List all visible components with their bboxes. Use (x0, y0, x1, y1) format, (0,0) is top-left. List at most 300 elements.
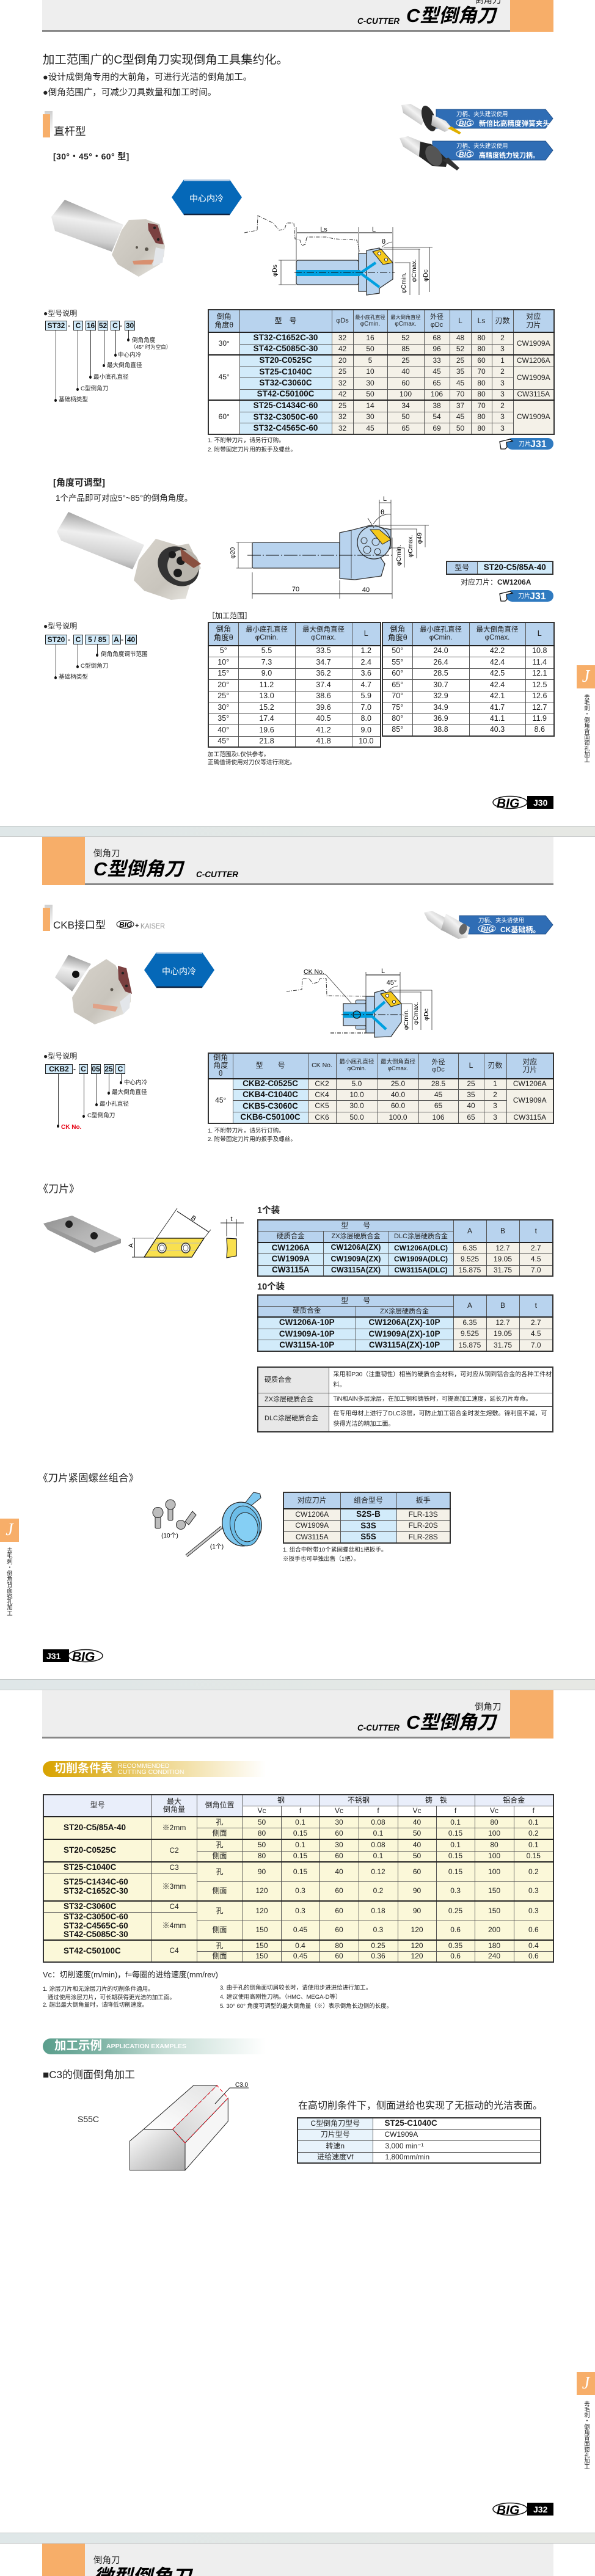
machining range table: 50-85 degrees: 12.7 (532, 703, 547, 712)
code boxes: C (76, 321, 81, 330)
cutting conditions table: 0.15 (293, 1829, 307, 1837)
cutting conditions table: ST32-C4565C-60 (64, 1921, 128, 1930)
section tab marker: straight shank (43, 111, 53, 137)
spec table: straight shank models: ST20-C0525C (259, 356, 312, 365)
spec table: straight shank models: 33 (433, 356, 441, 365)
spec table: CKB models: 最小底孔直径 (339, 1059, 374, 1065)
side tab J: J (582, 667, 590, 686)
cutting conditions table: 30 (335, 1841, 343, 1849)
page number J30 (492, 796, 553, 809)
insert table: ten pack: 12.7 (495, 1318, 510, 1327)
coating description table (257, 1366, 553, 1432)
cutting conditions table: 0.1 (295, 1841, 305, 1849)
conditions note 5: 5. 30° 60° 角度可调型的最大倒角量（※）表示倒角长边侧的长度。 (220, 2003, 392, 2010)
screw set note 2: ※扳手也可单独出售（1把）。 (283, 1556, 359, 1563)
screw set table: S3S (360, 1521, 376, 1530)
spec table: CKB models: 45 (434, 1090, 442, 1099)
insert table: single pack: 6.35 (462, 1244, 477, 1252)
diagram: adjustable angle cutter dimensions: 40 (362, 586, 370, 594)
spec table: straight shank models: ST32-C1652C-30 (254, 333, 318, 342)
page number J32: BIG (497, 2503, 519, 2517)
spec table: straight shank models: 80 (477, 334, 486, 342)
machining range table: 5-45 degrees: 倒角 (216, 625, 231, 633)
diagram: CKB cutter dimensions: φCmax. (412, 1002, 420, 1025)
machining range table: 5-45 degrees: 21.8 (259, 737, 274, 745)
code boxes: - (120, 321, 122, 330)
machining range table: 50-85 degrees: 28.5 (433, 669, 448, 677)
insert table: single pack: CW1206A(DLC) (394, 1244, 448, 1252)
side tab label: 去毛刺・倒角背面锪孔加工 (6, 1547, 13, 1616)
section heading: CKB connection type: CKB接口型 (53, 919, 106, 931)
spec table: straight shank models: 1 (500, 356, 505, 365)
machining range table: 5-45 degrees: 41.8 (316, 737, 331, 745)
callout: BIG collet holder recommendation (401, 104, 557, 134)
table note 1: 1. 不附带刀片，请另行订购。 (208, 1128, 285, 1134)
screw set table: FLR-28S (409, 1533, 438, 1541)
insert table: single pack: 4.5 (531, 1255, 541, 1263)
cutting conditions table: Vc (335, 1806, 343, 1815)
code boxes: ST32 (48, 321, 65, 330)
machining range table: 50-85 degrees: φCmin. (429, 634, 452, 641)
coating description table: ZX涂层硬质合金 (265, 1396, 313, 1403)
spec table: straight shank models: 2 (500, 367, 505, 376)
ribbon: application examples (43, 2038, 266, 2054)
cutting conditions table: 150 (255, 1952, 268, 1960)
insert table: single pack: CW1206A(ZX) (331, 1243, 381, 1252)
cutting conditions table: 0.2 (528, 1867, 539, 1876)
legend: center coolant: 中心内冷 (124, 1079, 147, 1086)
page 2 header (42, 837, 553, 885)
side tab label: 去毛刺・倒角背面锪孔加工 (583, 2401, 590, 2470)
header english name: C-CUTTER (357, 1723, 400, 1732)
spec table: straight shank models: 70 (456, 390, 464, 398)
code boxes: 40 (127, 635, 135, 644)
spec table: straight shank models: 50 (366, 390, 374, 398)
spec table: straight shank models: 刀片 (526, 320, 541, 329)
insert table: single pack: CW1909A(DLC) (394, 1255, 448, 1263)
machining range table: 50-85 degrees: 42.4 (490, 680, 505, 689)
example heading: ■C3的侧面倒角加工 (43, 2069, 135, 2081)
callout: CK base holder recommendation: CK基础柄。 (500, 925, 540, 934)
insert table: ten pack: CW1206A-10P (279, 1318, 335, 1327)
header subtitle: 倒角刀 (93, 2556, 120, 2566)
spec table: straight shank models: 45 (366, 424, 374, 432)
spec table: CKB models: φDc (432, 1066, 445, 1073)
insert table: ten pack: CW3115A-10P (279, 1340, 334, 1349)
spec table: CKB models: CW1206A (513, 1079, 547, 1088)
diagram: CKB cutter dimensions: L (381, 968, 385, 975)
cutting conditions table: ※3mm (162, 1882, 186, 1891)
screw set table: CW3115A (296, 1533, 329, 1541)
ribbon english (118, 1763, 184, 1775)
spec table: CKB models: L (469, 1061, 473, 1070)
diagram: CKB cutter dimensions: CK No. (304, 968, 324, 976)
spec table: CKB models: 倒角 (213, 1053, 228, 1062)
machining range table: 5-45 degrees: 9.0 (361, 726, 371, 734)
cutting conditions table: ST42-C50100C (64, 1946, 121, 1955)
spec table: straight shank models: 70 (477, 401, 486, 410)
badge: center internal coolant (144, 952, 215, 988)
insert table: single pack: A (467, 1227, 472, 1235)
page 3 header (42, 1690, 553, 1739)
cutting conditions table: 0.1 (373, 1829, 383, 1837)
spec table: straight shank models: 25 (456, 356, 464, 365)
machining range table: 5-45 degrees: 9.0 (261, 669, 272, 677)
cutting conditions table: C2 (169, 1846, 179, 1855)
spec table: straight shank models: 45° (219, 373, 230, 381)
spec table: straight shank models: 45 (433, 367, 441, 376)
code boxes: CKB2 (49, 1065, 69, 1073)
header subtitle: 倒角刀 (475, 1702, 501, 1712)
diagram: CKB cutter dimensions: φDc (423, 1009, 430, 1021)
machining range table: 50-85 degrees: 24.0 (433, 646, 448, 655)
cutting conditions table: 0.15 (293, 1852, 307, 1860)
spec table: straight shank models: 100 (400, 390, 412, 398)
example conditions table (297, 2117, 541, 2164)
spec table: straight shank models: 35 (456, 367, 464, 376)
cutting conditions table: 0.3 (528, 1886, 539, 1895)
code boxes: 52 (99, 321, 107, 330)
range note 1: 加工范围及L仅供参考。 (208, 751, 269, 758)
machining range table: 50-85 degrees: 34.9 (433, 703, 448, 712)
cutting conditions table: 铝合金 (503, 1796, 525, 1804)
callout: BIG high precision milling holder recommendation: 刀柄、夹头建议使用 (456, 142, 508, 149)
insert table: single pack: B (500, 1227, 505, 1235)
diagram: straight shank cutter dimensions: θ (382, 238, 385, 246)
machining range table: 5-45 degrees: 15.2 (259, 703, 274, 712)
cutting conditions table: 50 (258, 1841, 266, 1849)
range note 2: 正确值请使用对刀仪等进行测定。 (208, 759, 296, 766)
screw set table: FLR-13S (409, 1510, 438, 1519)
spec table: CKB models: CK6 (315, 1113, 329, 1122)
spec table: straight shank models: φCmin. (360, 320, 380, 327)
machining range table: 5-45 degrees: 20° (217, 680, 229, 689)
coating description table: 硬质合金 (265, 1376, 291, 1384)
logos: BIG + KAISER (117, 920, 166, 931)
insert table: ten pack: B (500, 1301, 505, 1310)
spec table: straight shank models: 3 (500, 412, 505, 421)
spec table: straight shank models: 52 (456, 345, 464, 353)
page number J30: BIG (497, 797, 519, 811)
machining range table: 5-45 degrees: 4.7 (361, 680, 371, 689)
code boxes: C (112, 321, 118, 330)
cutting conditions table: 150 (488, 1906, 500, 1915)
machining range table: 50-85 degrees: 32.9 (433, 691, 448, 700)
cutting conditions table: 0.3 (528, 1906, 539, 1915)
table note 1: 1. 不附带刀片，请另行订购。 (208, 437, 285, 444)
machining range table: 5-45 degrees: 40.5 (316, 714, 331, 723)
conditions note 2: 2. 超出最大倒角量时，请降低切削速度。 (43, 2002, 148, 2009)
machining range table: 50-85 degrees: 41.1 (490, 714, 505, 723)
spec table: straight shank models: 70 (477, 367, 486, 376)
material label: S55C (78, 2114, 99, 2124)
diagram: adjustable angle cutter dimensions: L (383, 495, 387, 503)
coating description table: DLC涂层硬质合金 (265, 1415, 318, 1422)
cutting conditions table: 90 (413, 1886, 421, 1895)
side tab J (577, 665, 595, 688)
insert table: ten pack: 15.875 (459, 1341, 481, 1349)
machining range table: 50-85 degrees: 角度θ (388, 633, 407, 642)
machining range table: 5-45 degrees: 3.6 (361, 669, 371, 677)
cutting conditions table: ST32-C3060C (64, 1902, 116, 1911)
callout: CK base holder recommendation: BIG (481, 925, 494, 933)
page number J32: J32 (533, 2505, 548, 2514)
screw set table: 组合型号 (354, 1496, 383, 1505)
machining range table: 5-45 degrees: 41.2 (316, 726, 331, 734)
spec table: CKB models: CKB6-C50100C (240, 1112, 301, 1122)
machining range table: 5-45 degrees: 40° (217, 726, 229, 734)
machining range table: 5-45 degrees: 7.0 (361, 703, 371, 712)
ribbon english: RECOMMENDED (118, 1762, 170, 1770)
page number J31: J31 (46, 1651, 61, 1661)
diagram: adjustable angle cutter dimensions (229, 495, 429, 599)
machining range table: 50-85 degrees: 8.6 (535, 725, 545, 734)
ribbon title: 加工示例 (54, 2039, 102, 2052)
ribbon english: APPLICATION EXAMPLES (106, 2043, 186, 2050)
section tab marker: CKB (43, 905, 54, 931)
callout: BIG collet holder recommendation: 新倍比高精度弹簧夹头。 (479, 119, 557, 128)
cutting conditions table: 60 (335, 1829, 343, 1837)
cutting conditions table: 50 (413, 1829, 421, 1837)
machining range table: 5-45 degrees: 36.2 (316, 669, 331, 677)
code boxes: - (121, 635, 123, 644)
spec table: CKB models: 3 (493, 1113, 497, 1122)
machining range table: 50-85 degrees: 50° (392, 646, 403, 655)
badge: center internal coolant: 中心内冷 (189, 194, 224, 203)
spec table: straight shank models: 80 (477, 379, 486, 387)
photo: adjustable angle cutter (57, 512, 201, 600)
cutting conditions table: 0.3 (450, 1886, 461, 1895)
spec table: CKB models: 65 (434, 1101, 442, 1110)
cutting conditions table: 0.4 (295, 1941, 305, 1950)
cutting conditions table: 60 (413, 1867, 421, 1876)
spec table: straight shank models: 刃数 (495, 316, 509, 325)
insert table: single pack (257, 1219, 553, 1277)
conditions note 1 (43, 1985, 175, 2002)
spec table: straight shank models: ST25-C1040C (259, 367, 312, 376)
spec table: straight shank models: 50 (456, 424, 464, 432)
cutting conditions table: 0.08 (371, 1818, 385, 1826)
compatible insert note: 对应刀片：CW1206A (461, 578, 531, 586)
machining range table: 5-45 degrees: 25° (217, 691, 229, 700)
machining range table: 50-85 degrees: 最小底孔直径 (420, 626, 462, 633)
cutting conditions table: 侧面 (212, 1925, 227, 1934)
cutting conditions table: 0.3 (295, 1886, 305, 1895)
spec table: straight shank models: CW1206A (517, 356, 550, 365)
conditions note 1: 通过使用涂层刀片，可长期获得更光洁的加工面。 (48, 1994, 175, 2001)
code boxes (45, 635, 137, 644)
cutting conditions table: ST25-C1434C-60 (64, 1877, 128, 1886)
spec table: CKB models: CK No. (312, 1062, 332, 1069)
machining range table: 50-85 degrees: 42.2 (490, 646, 505, 655)
code boxes: C (81, 1065, 86, 1073)
cutting conditions table: C4 (169, 1946, 179, 1955)
ribbon title: 切削条件表 (54, 1762, 112, 1775)
spec table: CKB models: 35 (467, 1090, 475, 1099)
illustration: clamp screws: (10个) (161, 1532, 178, 1539)
spec table: straight shank models: 65 (433, 379, 441, 387)
cutting conditions table: 100 (488, 1852, 500, 1860)
spec table: straight shank models: 30 (366, 412, 374, 421)
machining range table: 50-85 degrees: 10.8 (532, 646, 547, 655)
spec table: CKB models: 25 (467, 1079, 475, 1088)
cutting conditions table: ST20-C5/85A-40 (64, 1823, 126, 1832)
spec table: straight shank models: 65 (401, 424, 410, 432)
spec table: straight shank models: 60° (219, 412, 230, 421)
legend: Vc and f definitions: Vc：切削速度(m/min)，f=每圈的进给速度(mm/rev) (43, 1970, 218, 1979)
cutting conditions table: 0.1 (295, 1818, 305, 1826)
legend heading: ●型号说明 (43, 622, 77, 630)
spec table: straight shank models: ST32-C4565C-60 (254, 423, 318, 432)
header subtitle: 倒角刀 (93, 849, 120, 859)
subheading: adjustable angle type: [角度可调型] (53, 478, 105, 488)
cutting conditions table: 0.25 (371, 1941, 385, 1950)
spec table: straight shank models: 32 (338, 412, 346, 421)
photo: straight shank C cutter (51, 200, 165, 277)
machining range table: 5-45 degrees: 最大倒角直径 (302, 626, 345, 633)
insert table: ten pack: 6.35 (462, 1318, 477, 1327)
machining range table: 5-45 degrees: 5° (220, 646, 227, 655)
machining range table: 50-85 degrees: 12.5 (532, 680, 547, 689)
cutting conditions table: 0.1 (373, 1852, 383, 1860)
cutting conditions table: 90 (258, 1867, 266, 1876)
legend: C cutter: C型倒角刀 (81, 663, 108, 670)
insert table: ten pack: A (467, 1301, 472, 1310)
spec table: CKB models: φCmax. (388, 1065, 408, 1072)
machining range table: 50-85 degrees: 75° (392, 703, 403, 712)
screw set table: FLR-20S (409, 1521, 438, 1530)
cutting conditions table: ST20-C0525C (64, 1845, 116, 1855)
spec table: straight shank models: 42 (338, 345, 346, 353)
diagram: CKB cutter dimensions: 45° (387, 979, 396, 987)
spec table: straight shank models: 3 (500, 345, 505, 353)
heading: inserts: 《刀片》 (38, 1183, 79, 1195)
cutting conditions table: 80 (490, 1818, 498, 1826)
header title: C型倒角刀 (406, 5, 495, 26)
callout: BIG high precision milling holder recommendation: BIG (459, 150, 472, 159)
header english name: C-CUTTER (196, 870, 238, 879)
spec table: CKB models: φCmin. (348, 1065, 366, 1072)
code boxes: - (68, 321, 70, 330)
feature bullet 1: ●设计成倒角专用的大前角，可进行光洁的倒角加工。 (43, 73, 252, 82)
spec table: CKB models: CKB2-C0525C (243, 1079, 298, 1088)
spec table: CKB models: 28.5 (431, 1079, 445, 1088)
diagram: insert dimensions A, B, t (128, 1206, 246, 1260)
badge: center internal coolant: 中心内冷 (162, 966, 196, 976)
badge: insert page J31: 刀片 (518, 592, 530, 600)
spec table: straight shank models: 3 (500, 390, 505, 398)
cutting conditions table: 200 (488, 1925, 500, 1934)
cutting conditions table: 0.12 (371, 1867, 385, 1876)
coating description table: TiN和AlN多层涂层，在加工钢和铸铁时，可提高加工速度，延长刀片寿命。 (334, 1396, 531, 1403)
machining range table: 5-45 degrees (208, 622, 381, 748)
cutting conditions table: 80 (490, 1841, 498, 1849)
legend heading: ●型号说明 (43, 1052, 77, 1060)
cutting conditions table: 60 (335, 1925, 343, 1934)
insert table: single pack: 7.0 (531, 1266, 541, 1274)
cutting conditions table: 0.08 (371, 1841, 385, 1849)
insert table: ten pack: CW1909A-10P (279, 1329, 335, 1338)
insert table: ten pack: 19.05 (494, 1329, 512, 1338)
cutting conditions table: ※2mm (162, 1823, 186, 1832)
spec table: CKB models (208, 1053, 554, 1124)
machining range table: 5-45 degrees: 7.3 (261, 658, 272, 666)
insert table: single pack: CW3115A (272, 1265, 310, 1274)
diagram: insert dimensions A, B, t: B (189, 1214, 197, 1223)
spec table: straight shank models: 20 (338, 356, 346, 365)
spec table: CKB models: 45° (215, 1096, 226, 1104)
page divider band (0, 1679, 595, 1690)
machining range table: 5-45 degrees: 33.5 (316, 646, 331, 655)
spec table: CKB models: 65 (467, 1113, 475, 1122)
machining range table: 50-85 degrees: 12.1 (532, 669, 547, 677)
screw set table: 扳手 (416, 1496, 431, 1505)
insert table: ten pack: CW3115A(ZX)-10P (369, 1340, 440, 1349)
spec table: CKB models: 型 号 (255, 1061, 285, 1070)
diagram: straight shank cutter dimensions: φCmin. (400, 272, 407, 293)
side tab J left: J (5, 1520, 13, 1539)
spec table: straight shank models: 倒角 (217, 312, 232, 321)
machining range table: 5-45 degrees: 2.4 (361, 658, 371, 666)
machining range table: 50-85 degrees: 70° (392, 691, 403, 700)
cutting conditions table: 30 (335, 1818, 343, 1826)
insert table: ten pack: 7.0 (531, 1341, 541, 1349)
cutting conditions table: 0.4 (528, 1941, 539, 1950)
diagram: adjustable angle cutter dimensions: φ49 (416, 533, 423, 544)
cutting conditions table: 40 (335, 1867, 343, 1876)
cutting conditions table: f (377, 1806, 379, 1815)
code boxes: 25 (104, 1065, 113, 1073)
spec table: straight shank models: 85 (401, 345, 410, 353)
spec table: straight shank models: 60 (477, 356, 486, 365)
machining range table: 5-45 degrees: 34.7 (316, 658, 331, 666)
cutting conditions table: 0.1 (450, 1841, 461, 1849)
cutting conditions table: 60 (335, 1886, 343, 1895)
spec table: CKB models: 5.0 (352, 1079, 362, 1088)
model code legend: straight shank (43, 309, 171, 403)
spec table: straight shank models: 48 (456, 334, 464, 342)
spec table: CKB models: 3 (493, 1101, 497, 1110)
heading: ten pack: 10个装 (257, 1282, 285, 1292)
diagram: straight shank cutter dimensions: φCmax. (411, 259, 418, 282)
machining range table: 5-45 degrees: 角度θ (214, 633, 233, 642)
code boxes (45, 321, 135, 330)
cutting conditions table: 80 (258, 1829, 266, 1837)
legend: min bore diameter: 最小底孔直径 (93, 374, 129, 381)
cutting conditions table: 40 (413, 1818, 421, 1826)
example conditions table: 进给速度Vf (317, 2153, 353, 2161)
spec table: straight shank models: 45 (456, 412, 464, 421)
legend: min hole diameter: 最小孔直径 (100, 1101, 129, 1107)
spec table: straight shank models: 42 (338, 390, 346, 398)
cutting conditions table: 50 (258, 1818, 266, 1826)
legend: base shank type: 基础柄类型 (59, 674, 88, 680)
spec table: CKB models: 40.0 (391, 1090, 405, 1099)
spec table: straight shank models: 对应 (526, 312, 541, 321)
table note 2: 2. 附带固定刀片用的扳手及螺丝。 (208, 447, 296, 453)
insert table: ten pack: ZX涂层硬质合金 (380, 1308, 429, 1315)
machining range table: 5-45 degrees: 15° (217, 669, 229, 677)
code boxes: 16 (87, 321, 95, 330)
spec table: straight shank models: 106 (431, 390, 443, 398)
spec table: straight shank models: 32 (338, 379, 346, 387)
screw set table: S5S (360, 1532, 376, 1541)
logos: BIG + KAISER: KAISER (141, 922, 165, 930)
cutting conditions table: 侧面 (212, 1886, 227, 1895)
cutting conditions table: ST32-C3050C-60 (64, 1912, 128, 1921)
machining range table: 5-45 degrees: 11.2 (260, 680, 274, 689)
callout: BIG collet holder recommendation: 刀柄、夹头建议使用 (456, 111, 508, 117)
